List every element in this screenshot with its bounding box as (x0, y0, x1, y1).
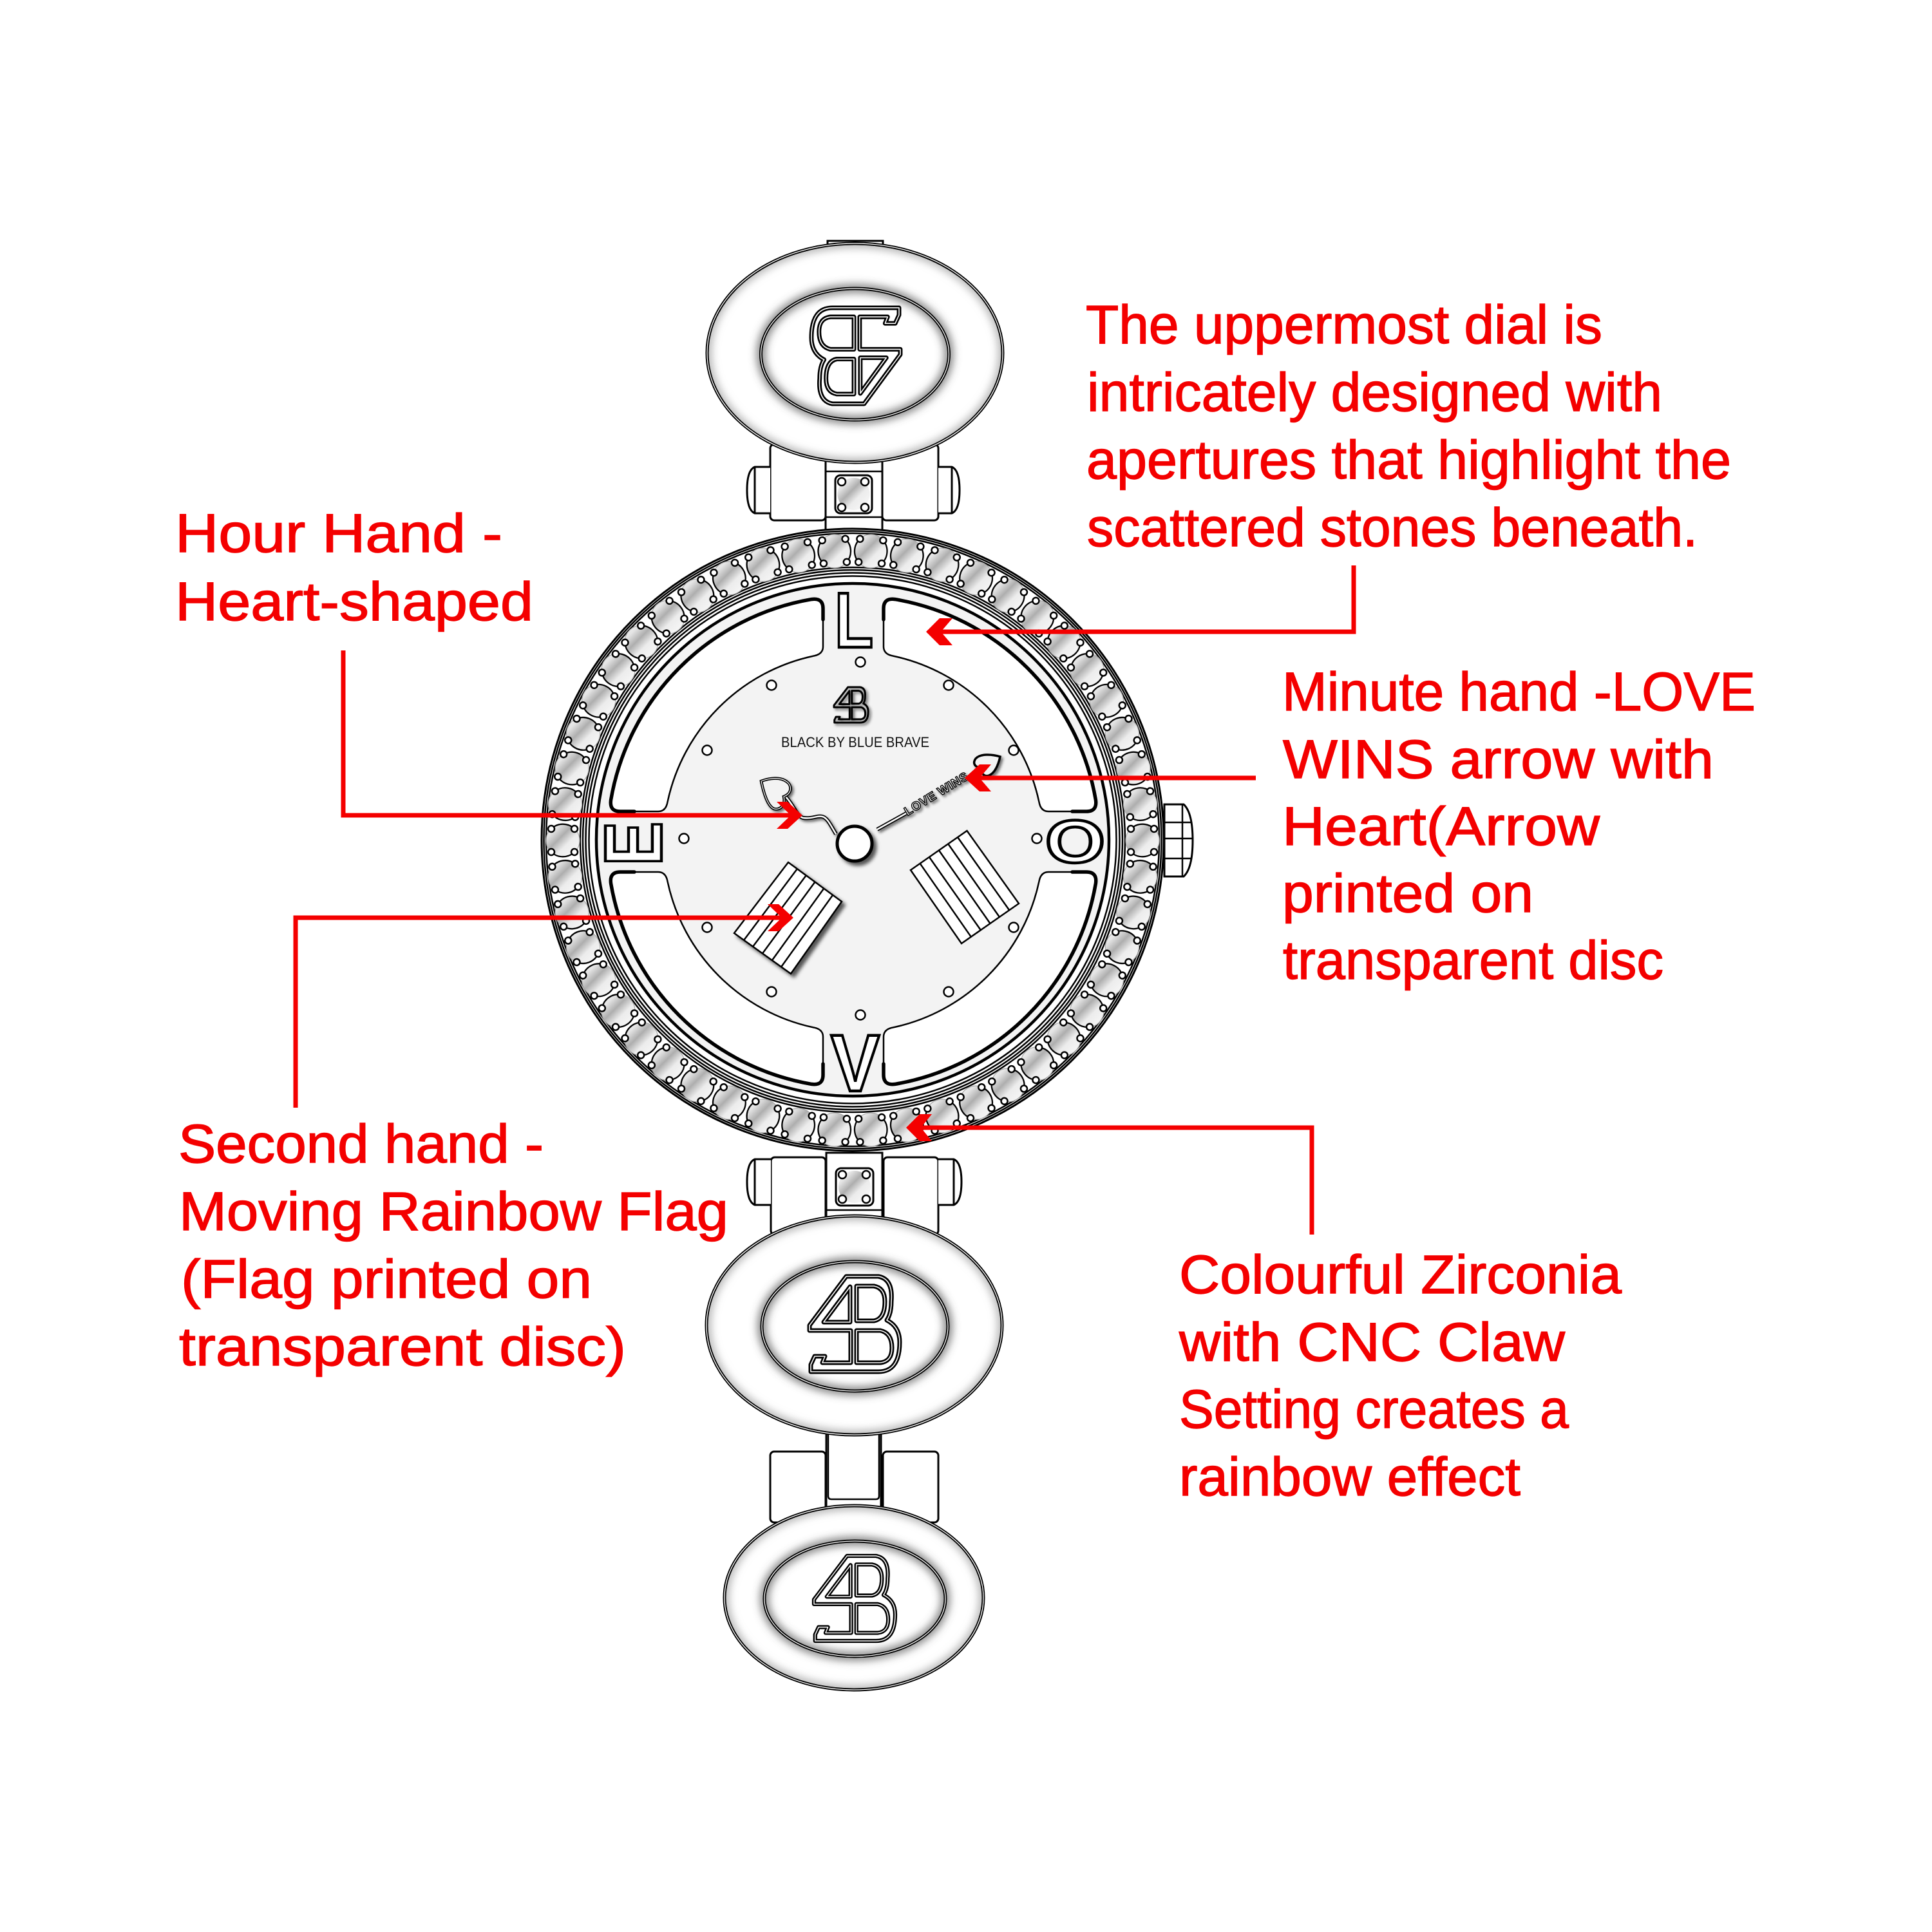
text: uppermost dial: The uppermost dial is (1086, 294, 1602, 355)
arrow: second hand (296, 904, 793, 1108)
arrow: hour hand (343, 650, 802, 829)
text: zirconia: Colourful Zirconia (1179, 1244, 1622, 1305)
center hub (837, 826, 872, 861)
text: zirconia: with CNC Claw (1179, 1312, 1565, 1372)
text: hour hand: Heart-shaped (175, 571, 533, 632)
text: uppermost dial: apertures that highlight the (1086, 430, 1731, 490)
bezel rings (542, 529, 1164, 1151)
middle connector link (770, 1426, 938, 1522)
rainbow flag (second hand) (734, 862, 842, 974)
dial letters LOVE: O (1045, 808, 1105, 875)
bottom oval link with logo (724, 1506, 983, 1690)
watch illustration (542, 241, 1193, 1690)
text: second hand (178, 1113, 728, 1377)
dial apertures (611, 599, 1096, 1084)
text: minute hand: Heart(Arrow (1282, 796, 1600, 857)
upper bracelet link (747, 444, 960, 531)
crown (1164, 804, 1193, 876)
text: minute hand (1282, 661, 1756, 990)
arrow: minute hand (965, 764, 1256, 791)
text: hour hand: Hour Hand - (175, 503, 502, 564)
hour markers (679, 657, 1042, 1020)
dial logo (834, 687, 868, 723)
dial letters LOVE: L (835, 576, 873, 664)
hour hand heart (761, 779, 836, 834)
text: uppermost dial: intricately designed with (1087, 362, 1662, 422)
text: zirconia (1179, 1244, 1622, 1507)
lower bracelet link with stone (747, 1153, 961, 1235)
dial letters LOVE: V (831, 1019, 880, 1108)
arrow: zirconia (906, 1114, 1312, 1235)
text: uppermost dial: scattered stones beneath. (1087, 497, 1698, 558)
dial letters LOVE: E (588, 822, 679, 866)
text: second hand: transparent disc) (179, 1316, 626, 1377)
second flag (911, 831, 1019, 943)
text: zirconia: rainbow effect (1179, 1446, 1520, 1507)
text: hour hand (175, 503, 533, 632)
minute hand with LOVE WINS: LOVE WINS (902, 770, 971, 819)
brand name: BLACK BY BLUE BRAVE (781, 734, 929, 750)
text: zirconia: Setting creates a (1179, 1379, 1569, 1439)
minute hand with LOVE WINS (877, 755, 1000, 829)
bezel stones (546, 533, 1159, 1148)
top oval link with inverted logo (707, 241, 1003, 462)
text: second hand: Second hand - (178, 1113, 544, 1174)
text: minute hand: WINS arrow with (1283, 729, 1714, 790)
text: minute hand: Minute hand -LOVE (1282, 661, 1756, 722)
text: second hand: Moving Rainbow Flag (179, 1181, 728, 1242)
text: minute hand: printed on (1282, 863, 1533, 923)
text: second hand: (Flag printed on (181, 1249, 592, 1309)
text: uppermost dial (1086, 294, 1731, 558)
dial letters LOVE (588, 576, 1105, 1108)
text: minute hand: transparent disc (1283, 930, 1663, 990)
second oval link with logo (706, 1216, 1002, 1435)
arrow: uppermost dial (926, 565, 1354, 645)
